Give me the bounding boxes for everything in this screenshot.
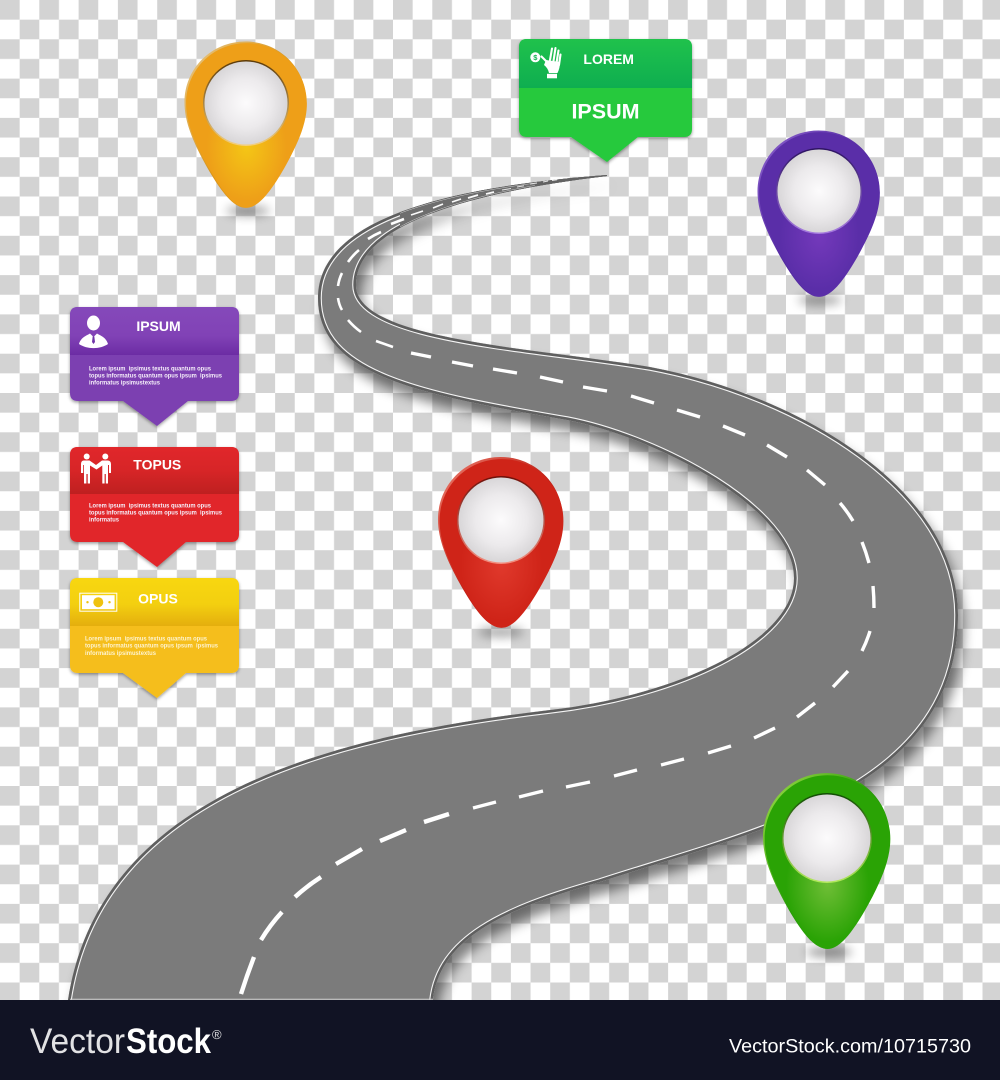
footer logo [30, 1022, 222, 1061]
callout body [70, 447, 239, 567]
road shadow [71, 186, 963, 1023]
body text: informatus ipsimustextus [89, 380, 160, 387]
callout: purple IPSUM [70, 307, 239, 426]
road surface with edge lines [68, 175, 958, 1000]
callout: green LOREM IPSUM [519, 39, 692, 162]
pin shadow [478, 627, 524, 637]
winding road [66, 175, 972, 1000]
footer logo: Vector [30, 1022, 125, 1061]
pin white disc [784, 794, 870, 882]
body text: topus informatus quantum opus ipsum ipsimus [85, 643, 218, 650]
body text: informatus ipsimustextus [85, 650, 156, 657]
icon: hand holding coin [530, 48, 560, 78]
icon: two people shaking hands [81, 454, 111, 484]
body text: Lorem ipsum ipsimus textus quantum opus [89, 502, 211, 509]
pin rim [438, 457, 563, 627]
body text [89, 365, 222, 387]
pin rim [763, 773, 890, 949]
footer image id: VectorStock.com/10715730 [729, 1037, 971, 1058]
callout header band [70, 447, 239, 494]
pin: purple [758, 130, 880, 305]
pin: orange [184, 42, 307, 216]
body text [89, 502, 222, 523]
footer logo: Stock [126, 1022, 211, 1061]
road centre dashes, near middle [411, 353, 874, 808]
footer bar [0, 1000, 1000, 1080]
pin body [759, 132, 880, 297]
heading: LOREM: LOREM [583, 51, 634, 67]
callout: red TOPUS [70, 447, 239, 567]
pin white disc [458, 478, 544, 562]
callout body [519, 39, 692, 162]
heading: IPSUM: IPSUM [136, 318, 181, 334]
pin shadow [798, 295, 842, 305]
body text [85, 636, 218, 657]
pin ring [203, 60, 289, 146]
road bottom edge line [70, 998, 433, 1000]
pin: red [438, 457, 563, 637]
heading: TOPUS: TOPUS [133, 456, 181, 472]
callout header band [70, 307, 239, 355]
callout body [70, 307, 239, 426]
callout header band [70, 578, 239, 626]
body text: topus informatus quantum opus ipsum ipsimus [89, 509, 222, 516]
footer logo: ® [212, 1027, 222, 1042]
body text: Lorem ipsum ipsimus textus quantum opus [85, 636, 207, 643]
body text: topus informatus quantum opus ipsum ipsimus [89, 372, 222, 379]
callout body [70, 578, 239, 698]
pin rim [758, 130, 880, 297]
pin white disc [204, 62, 288, 144]
icon: hand holding coin: $ [533, 53, 538, 62]
heading: IPSUM: IPSUM [571, 99, 640, 123]
callout header band [519, 39, 692, 88]
road centre dashes, bend [338, 219, 404, 347]
pin rim [184, 42, 306, 208]
icon: person [79, 316, 108, 348]
road centre dashes, middle distance [411, 192, 494, 215]
pin shadow [806, 947, 852, 957]
pin ring [457, 476, 545, 564]
pin body [186, 43, 307, 208]
pin: green [763, 773, 890, 957]
body text: informatus [89, 516, 119, 523]
pin ring [782, 793, 872, 883]
pin white disc [778, 150, 860, 232]
pin body [765, 775, 890, 949]
body text: Lorem ipsum ipsimus textus quantum opus [89, 365, 211, 372]
pin ring [776, 148, 862, 234]
pin shadow [226, 206, 270, 216]
road centre dashes, foreground [241, 814, 449, 994]
callout: yellow OPUS [70, 578, 239, 698]
road centre dashes, far [502, 180, 557, 190]
pin body [440, 459, 563, 628]
heading: OPUS: OPUS [138, 590, 178, 606]
icon: banknote [80, 593, 117, 611]
